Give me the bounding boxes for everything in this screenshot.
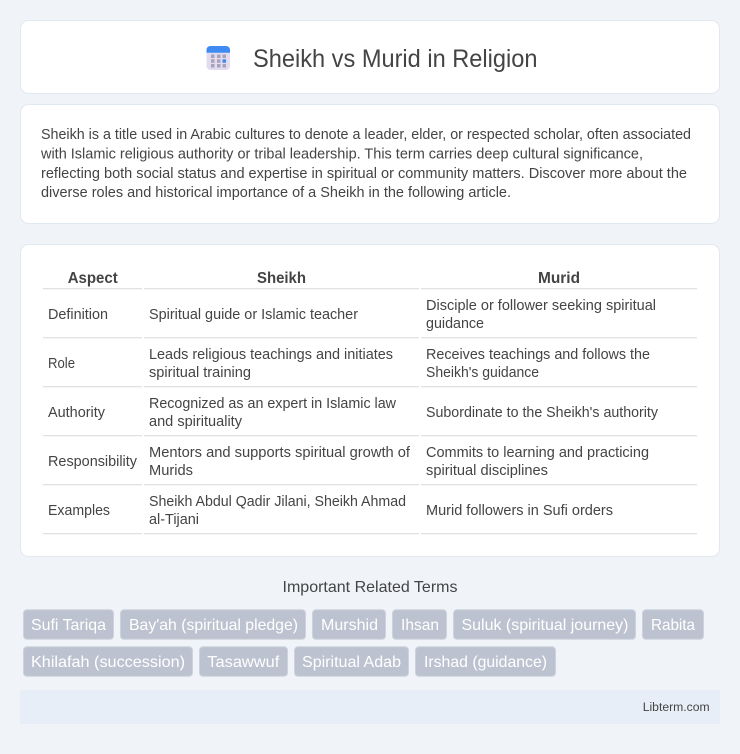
row: responsibility: Murids [149,463,193,479]
tag [294,647,408,676]
row: examples: al-Tijani [149,512,199,528]
tag [312,610,386,639]
icon: calendar [206,46,230,70]
intro text: Sheikh is a title used in Arabic cultures to denote a leader, elder, or respected scholar, often associated [41,127,691,143]
row: responsibility: spiritual disciplines [426,463,548,479]
footer credit: Libterm.com [643,700,710,714]
tag [24,610,114,639]
row: role: Leads religious teachings and initiates [149,347,393,363]
intro text: diverse roles and historical importance of a Sheikh in the following article. [41,185,511,201]
tag [642,610,704,639]
tag [24,647,192,676]
panel: title header [20,20,720,94]
row: examples: Sheikh Abdul Qadir Jilani, Sheikh Ahmad [149,494,406,510]
tag [416,647,556,676]
row: responsibility: Mentors and supports spiritual growth of [149,445,411,461]
tag: Suluk (spiritual journey) [462,617,628,634]
tag [200,647,288,676]
row: definition [48,298,656,332]
row: responsibility: Responsibility [48,454,138,470]
row: role: spiritual training [149,365,251,381]
row: authority: Subordinate to the Sheikh's authority [426,405,659,421]
footer bar [20,690,720,724]
panel: comparison table [20,244,720,556]
tag: Bay'ah (spiritual pledge) [129,617,298,634]
tag [454,610,636,639]
tag: Murshid [321,617,378,634]
row: examples [48,494,613,528]
intro text [40,127,691,201]
intro text: with Islamic religious authority or tribal leadership. This term carries deep cultural significance, [40,146,643,162]
row: authority: Authority [48,405,106,421]
row: authority: and spirituality [149,414,243,430]
panel: introduction [20,104,720,224]
row: definition: guidance [426,316,484,332]
tag: Irshad (guidance) [424,654,547,671]
intro text: reflecting both social status and expertise in spiritual or community matters. Discover more about the [41,166,687,182]
table grid lines [43,288,697,534]
tag: Ihsan [401,617,439,634]
tag [392,610,446,639]
table header: Aspect [68,270,118,287]
title: Sheikh vs Murid in Religion [253,46,538,73]
tag: Tasawwuf [207,654,280,671]
tag: Spiritual Adab [302,654,401,671]
row: definition: Disciple or follower seeking spiritual [426,298,656,314]
related terms heading: Important Related Terms [282,579,458,596]
tag: Khilafah (succession) [31,654,185,671]
row: examples: Examples [48,503,110,519]
row: role [48,347,650,381]
tag [120,610,306,639]
row: responsibility [48,445,649,479]
row: authority [48,396,659,430]
row: role: Receives teachings and follows the [426,347,650,363]
table header: Murid [538,270,580,287]
tag: Rabita [651,617,695,634]
row: definition: Definition [48,307,108,323]
related terms tags [24,610,704,676]
row: role: Role [48,356,75,372]
tag: Sufi Tariqa [31,617,106,634]
row: responsibility: Commits to learning and practicing [426,445,649,461]
table header: Sheikh [257,270,306,287]
row: definition: Spiritual guide or Islamic teacher [149,307,358,323]
row: examples: Murid followers in Sufi orders [426,503,613,519]
row: authority: Recognized as an expert in Islamic law [149,396,397,412]
table header [68,270,580,287]
row: role: Sheikh's guidance [426,365,539,381]
